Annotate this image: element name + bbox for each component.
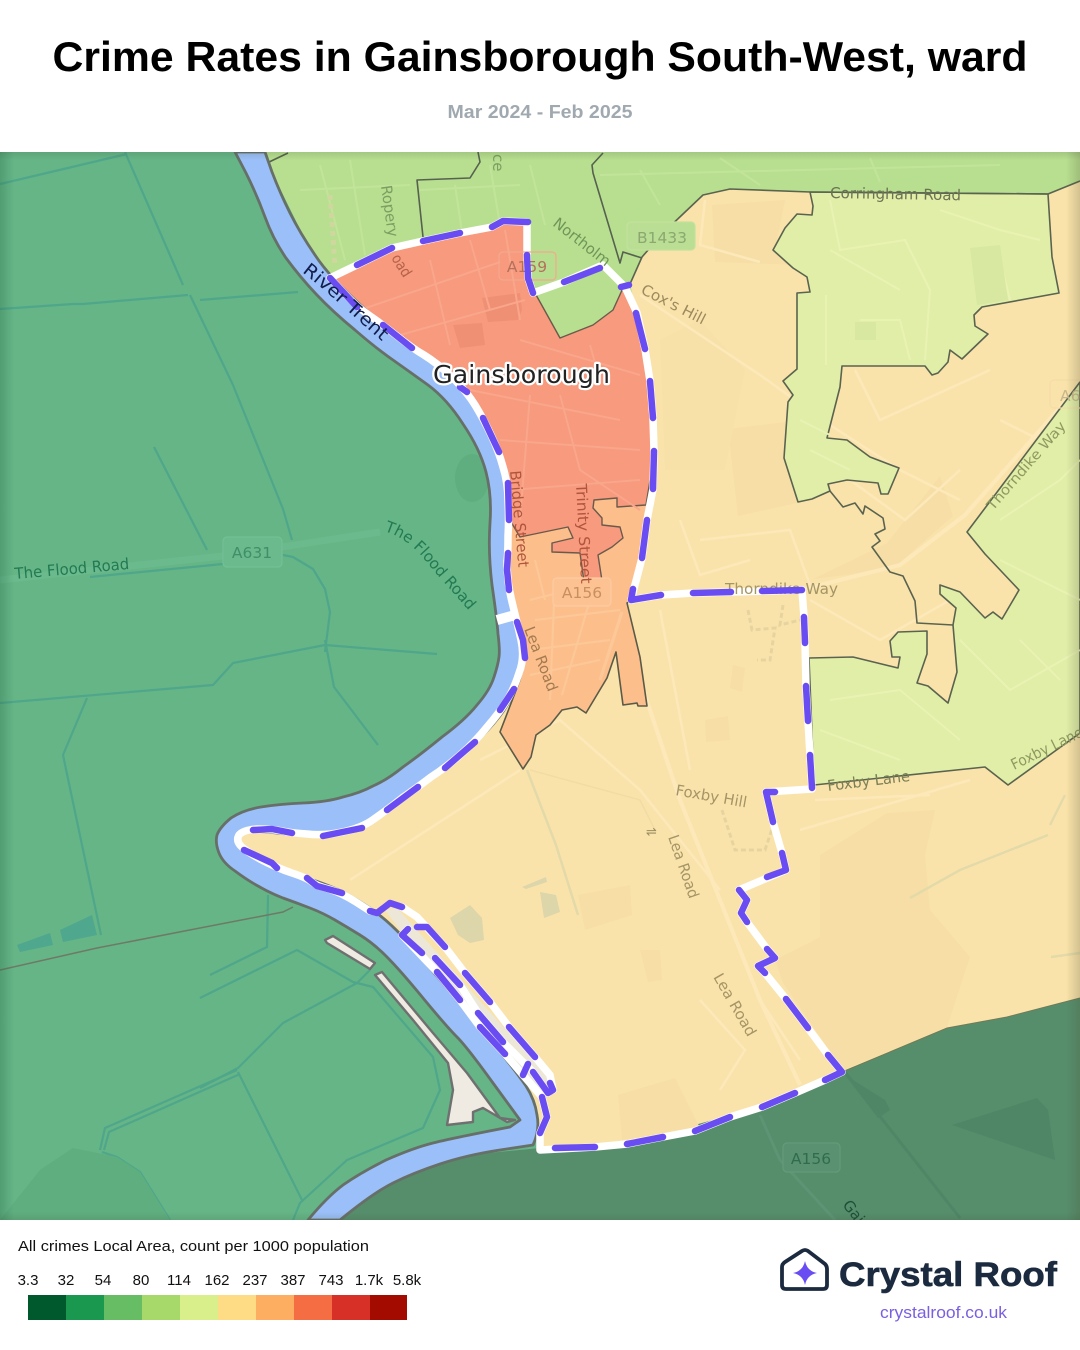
label: Thorndike Way east: Thorndike Way	[983, 419, 1069, 514]
subtitle: date range: Mar 2024 - Feb 2025	[448, 102, 632, 122]
shield: A156 north: A156	[562, 584, 602, 602]
shield: A159	[499, 252, 556, 280]
details: railway and footpaths in sand zone	[527, 605, 1080, 957]
shield: B1433	[627, 222, 695, 250]
area: light grey dock strip	[385, 908, 555, 1090]
label: Gainsborough town: Gainsborough	[433, 360, 610, 389]
roads: light green zones	[800, 200, 1080, 760]
shield: A156 south: A156	[791, 1150, 831, 1168]
label: oad: oad	[388, 251, 416, 280]
rail station symbol: ⇌	[646, 825, 657, 840]
wordmark: Crystal Roof	[839, 1256, 1058, 1294]
label: Cox's Hill: Cox's Hill	[638, 281, 709, 328]
label: Northolm: Northolm	[550, 214, 614, 270]
area: red high-crime zone	[330, 221, 655, 589]
details: southern fields and railway	[846, 1074, 1050, 1216]
shield: A159: A159	[507, 258, 547, 276]
legend tick values	[18, 1272, 422, 1289]
roads: orange zone	[530, 560, 622, 700]
boundaries: northern zone	[267, 152, 642, 263]
legend tick values: 387	[280, 1272, 306, 1289]
area: west farmland, low crime	[0, 152, 714, 1220]
details: red zone buildings	[453, 293, 522, 348]
area: north-east light green zone	[773, 192, 1059, 502]
label: River Trent: River Trent	[303, 262, 388, 341]
legend swatches	[28, 1295, 407, 1320]
drains: western farmland	[0, 152, 440, 1220]
label: Thorndike Way south: Thorndike Way	[724, 580, 838, 598]
shield: A6 clipped: A6	[1060, 387, 1080, 405]
islands: dock strips	[325, 936, 515, 1125]
legend title: All crimes Local Area, count per 1000 population	[18, 1238, 369, 1255]
area: mid-crime sand zone	[235, 181, 1080, 1150]
icon: house with sparkle	[782, 1250, 827, 1289]
legend tick values: 5.8k	[393, 1272, 422, 1289]
website url: crystalroof.co.uk	[880, 1304, 1008, 1322]
legend tick values: 162	[204, 1272, 230, 1289]
title: Crime Rates in Gainsborough South-West, ward	[52, 33, 1028, 80]
legend tick values: 743	[318, 1272, 344, 1289]
details: light green field patches	[986, 260, 1006, 304]
shield: A6 clipped	[1050, 380, 1080, 408]
road: A631 Flood Road	[0, 578, 18, 581]
legend tick values: 1.7k	[355, 1272, 384, 1289]
power line	[0, 907, 293, 970]
boundary: internal sand zone outline	[830, 491, 953, 625]
shield: A156 south	[783, 1143, 840, 1172]
shield: A631	[223, 537, 282, 567]
details: industrial patches	[450, 877, 560, 943]
shield: A156 north	[553, 578, 611, 606]
legend tick values: 3.3	[18, 1272, 38, 1289]
logo: Crystal Roof	[782, 1250, 1058, 1322]
label: The Flood Road west: The Flood Road	[13, 555, 130, 583]
label: Foxby Hill: Foxby Hill	[674, 781, 748, 811]
boundary: sand zone top edge	[630, 181, 1080, 284]
area: south-east light green zone	[809, 382, 1080, 785]
legend tick values: 54	[95, 1272, 111, 1289]
area: northern mid-green zone	[262, 152, 1080, 345]
shield: B1433: B1433	[637, 229, 687, 247]
legend tick values: 80	[133, 1272, 149, 1289]
label: The Flood Road east: The Flood Road	[388, 520, 477, 610]
ward boundary: white casing	[238, 221, 842, 1150]
legend tick values: 32	[58, 1272, 74, 1289]
label: Lea Road south: Lea Road	[710, 970, 760, 1040]
label: Lea Road north: Lea Road	[520, 624, 561, 694]
label: ce: ce	[489, 154, 507, 171]
roads: sand zone	[350, 200, 1080, 1090]
label: Gai clipped: Gainsborough	[839, 1196, 917, 1290]
legend tick values: 114	[167, 1272, 191, 1289]
label: Lea Road middle: Lea Road	[664, 832, 703, 901]
ward boundary: purple dashes	[244, 221, 842, 1148]
label: Trinity Street: Trinity Street	[572, 482, 595, 584]
shield: A631: A631	[232, 544, 272, 562]
label: Foxby Lane: Foxby Lane	[826, 767, 911, 795]
river: Trent	[216, 152, 538, 1220]
legend tick values: 237	[242, 1272, 268, 1289]
label: Ropery: Ropery	[377, 184, 402, 238]
label: Corringham Road: Corringham Road	[830, 184, 961, 204]
label: Bridge Street: Bridge Street	[506, 470, 532, 568]
details: sand zone field patches	[666, 1124, 699, 1133]
details: dark ponds and hill	[17, 915, 170, 1220]
legend: crimes colour scale	[18, 1238, 422, 1320]
area: southern low-crime band	[340, 998, 1080, 1220]
area: orange high-crime zone	[500, 490, 650, 769]
roads: northern zone	[300, 158, 1000, 265]
boundary: sand zone south edge	[842, 998, 1080, 1072]
roads: red zone	[360, 230, 640, 520]
edge vignette	[0, 152, 1080, 1220]
